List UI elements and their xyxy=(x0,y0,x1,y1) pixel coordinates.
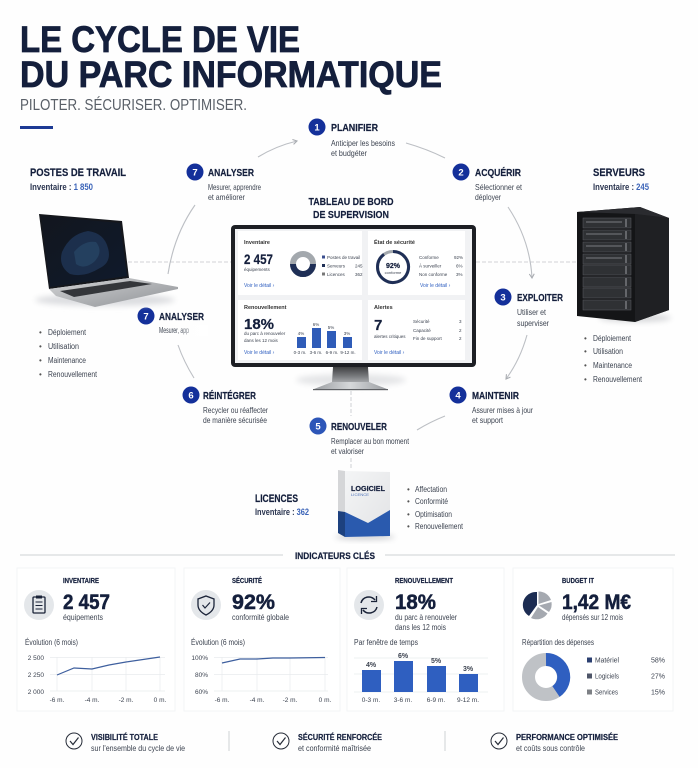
title xyxy=(20,18,442,95)
list: postes de travail: Renouvellement xyxy=(48,370,98,379)
step 2: acquerir xyxy=(452,164,523,202)
panel: inventaire: INVENTAIRE xyxy=(63,578,99,585)
subtitle: PILOTER. SÉCURISER. OPTIMISER. xyxy=(20,97,247,114)
list: serveurs: • xyxy=(584,375,587,384)
list: serveurs: Renouvellement xyxy=(593,375,643,384)
card: alertes: Sécurité xyxy=(413,319,430,324)
list: postes de travail: • xyxy=(39,342,42,351)
card: alertes: 7 xyxy=(374,317,382,334)
step 1: planifier: Anticiper les besoins xyxy=(331,138,395,148)
list: postes de travail: Utilisation xyxy=(48,342,79,351)
step 3: exploiter: Utiliser et xyxy=(517,307,547,317)
card: etat de securite: 92% xyxy=(454,255,463,260)
line chart: securite: -2 m. xyxy=(283,697,298,704)
line chart: inventaire: 2 000 xyxy=(28,689,44,696)
legend: budget xyxy=(587,658,665,696)
icon: refresh xyxy=(354,590,384,620)
panel: securite xyxy=(184,568,340,711)
line chart: securite: -4 m. xyxy=(250,697,265,704)
card: etat de securite xyxy=(368,231,465,295)
list: postes de travail: • xyxy=(39,356,42,365)
step 1: planifier xyxy=(308,118,395,158)
list: licences: • xyxy=(407,510,410,519)
step 4: maintenir: et support xyxy=(472,415,504,425)
panel: licences heading: LICENCES xyxy=(255,493,298,505)
card: alertes: Fin de support xyxy=(413,336,443,341)
step 2: acquerir: ACQUÉRIR xyxy=(475,166,522,179)
panel: licences heading xyxy=(255,493,309,517)
benefit: performance optimisee: et coûts sous contrôle xyxy=(516,744,585,753)
dashed connectors xyxy=(128,262,578,470)
list: serveurs: • xyxy=(584,347,587,356)
panel: inventaire xyxy=(17,568,175,711)
card: renouvellement: 3% xyxy=(344,331,350,336)
card: etat de securite: Conforme xyxy=(419,255,439,260)
list: licences xyxy=(407,485,464,531)
icon: laptop xyxy=(35,214,178,307)
legend: budget: Matériel xyxy=(595,658,619,664)
list: postes de travail: Déploiement xyxy=(48,328,87,337)
list: licences: • xyxy=(407,522,410,531)
card: etat de securite: État de sécurité xyxy=(374,238,415,246)
section heading: indicateurs cles: INDICATEURS CLÉS xyxy=(295,551,375,562)
panel: licences heading: Inventaire : 362 xyxy=(255,507,309,517)
line chart: inventaire: 2 250 xyxy=(28,672,44,679)
list: serveurs: • xyxy=(584,361,587,370)
line chart: securite: -6 m. xyxy=(215,697,230,704)
line chart: inventaire: 0 m. xyxy=(154,697,167,704)
list: licences: Optimisation xyxy=(415,510,452,519)
step 5: renouveler: et valoriser xyxy=(331,446,364,456)
bar chart: renouvellement: 0-3 m. xyxy=(362,697,380,704)
card: inventaire: équipements xyxy=(244,267,271,272)
step 6: reintegrer: Recycler ou réaffecter xyxy=(203,405,268,415)
panel: budget it: 1,42 M€ xyxy=(562,591,631,614)
cycle arrows xyxy=(168,141,532,430)
step 5: renouveler: Remplacer au bon moment xyxy=(331,436,409,446)
benefit: visibilite totale xyxy=(66,733,185,753)
panel: securite: conformité globale xyxy=(232,613,289,622)
panel: inventaire: Évolution (6 mois) xyxy=(25,638,78,647)
card: renouvellement: 6% xyxy=(313,322,319,327)
bar chart: renouvellement: 3-6 m. xyxy=(394,697,412,704)
step 3: exploiter: EXPLOITER xyxy=(517,293,564,304)
card: inventaire: Postes de travail xyxy=(327,255,360,260)
step 7: analyser (lower) xyxy=(138,308,208,336)
benefit: securite renforcee xyxy=(273,733,383,753)
panel: serveurs heading: SERVEURS xyxy=(593,167,645,179)
card: alertes xyxy=(368,300,465,360)
icon: clipboard xyxy=(24,590,54,620)
card: etat de securite: conforme xyxy=(385,270,402,275)
card: inventaire: Serveurs xyxy=(327,264,346,268)
card: renouvellement: 3-6 m. xyxy=(310,350,322,355)
step 4: maintenir: Assurer mises à jour xyxy=(472,405,533,415)
list: postes de travail xyxy=(39,328,98,379)
panel: inventaire: équipements xyxy=(63,613,103,622)
step 3: exploiter: superviser xyxy=(517,318,549,328)
card: renouvellement: 0-3 m. xyxy=(294,350,306,355)
panel: renouvellement: dans les 12 mois xyxy=(395,623,446,632)
step 7: analyser (top): et améliorer xyxy=(208,192,245,202)
icon: software licence box: LICENCE xyxy=(351,493,369,497)
card: etat de securite: 3% xyxy=(456,272,463,277)
panel: renouvellement xyxy=(347,568,504,711)
card: etat de securite: Non conforme xyxy=(419,272,448,277)
card: renouvellement: dans les 12 mois xyxy=(244,338,279,343)
step 4: maintenir xyxy=(450,386,533,425)
step 5: renouveler xyxy=(310,418,409,456)
title: DU PARC INFORMATIQUE xyxy=(20,53,442,95)
step 6: reintegrer: 6 xyxy=(188,390,194,402)
line chart: securite: 0 m. xyxy=(319,697,332,704)
benefit: securite renforcee: et conformité maîtrisée xyxy=(298,744,371,753)
step 7: analyser (lower): Mesurer, app xyxy=(159,325,189,335)
panel: inventaire: 2 457 xyxy=(63,591,110,614)
line chart: inventaire xyxy=(28,655,167,704)
panel: securite: 92% xyxy=(232,591,275,614)
benefit: securite renforcee: SÉCURITÉ RENFORCÉE xyxy=(298,733,383,742)
bar chart: renouvellement: 9-12 m. xyxy=(457,697,479,704)
card: renouvellement: 18% xyxy=(244,316,274,333)
list: serveurs: Utilisation xyxy=(593,347,623,356)
legend: budget: 27% xyxy=(651,674,665,680)
card: alertes: 2 xyxy=(459,328,462,333)
benefit: visibilite totale: VISIBILITÉ TOTALE xyxy=(91,733,159,742)
icon: software licence box: LOGICIEL xyxy=(351,484,385,493)
monitor dashboard xyxy=(231,225,476,390)
card: inventaire xyxy=(238,231,363,295)
step 6: reintegrer xyxy=(182,386,268,425)
card: inventaire: Inventaire xyxy=(244,240,270,246)
list: serveurs xyxy=(584,334,643,384)
step 7: analyser (top): Mesurer, apprendre xyxy=(208,182,261,192)
panel: renouvellement: RENOUVELLEMENT xyxy=(395,578,454,585)
card: inventaire: 245 xyxy=(355,264,363,268)
step 7: analyser (top): ANALYSER xyxy=(208,168,255,179)
list: postes de travail: • xyxy=(39,328,42,337)
icon: server rack xyxy=(577,207,671,322)
card: alertes: Alertes xyxy=(374,305,393,311)
list: licences: Affectation xyxy=(415,485,447,494)
list: serveurs: • xyxy=(584,334,587,343)
benefit: visibilite totale: sur l'ensemble du cycle de vie xyxy=(91,744,185,753)
step 2: acquerir: déployer xyxy=(475,192,501,202)
list: serveurs: Déploiement xyxy=(593,334,632,343)
list: postes de travail: Maintenance xyxy=(48,356,86,365)
card: renouvellement: 9-12 m. xyxy=(340,350,356,355)
donut chart: budget xyxy=(528,659,564,694)
bar chart: renouvellement: 6-9 m. xyxy=(427,697,445,704)
panel: budget it: BUDGET IT xyxy=(562,578,595,585)
card: inventaire: 2 457 xyxy=(244,251,273,267)
step 2: acquerir: 2 xyxy=(458,168,464,178)
card: renouvellement: Voir le détail › xyxy=(244,350,275,356)
step 4: maintenir: MAINTENIR xyxy=(472,391,520,402)
panel: renouvellement: 18% xyxy=(395,591,436,614)
card: renouvellement: 4% xyxy=(298,331,304,336)
bar chart: renouvellement xyxy=(354,653,488,704)
panel: postes de travail heading: Inventaire : 1 850 xyxy=(30,182,93,192)
card: inventaire: Voir le détail › xyxy=(244,283,275,289)
step 6: reintegrer: de manière sécurisée xyxy=(203,415,267,425)
step 7: analyser (lower): ANALYSER xyxy=(159,312,205,323)
bar chart: renouvellement: 4% xyxy=(366,662,377,669)
card: etat de securite: Voir le détail › xyxy=(420,283,451,289)
title: LE CYCLE DE VIE xyxy=(20,18,300,60)
list: licences: • xyxy=(407,485,410,494)
bar chart: renouvellement: 3% xyxy=(463,666,474,673)
step 6: reintegrer: RÉINTÉGRER xyxy=(203,389,257,402)
line chart: securite: 60% xyxy=(195,689,208,696)
line chart: inventaire: -6 m. xyxy=(50,697,65,704)
step 7: analyser (top): 7 xyxy=(192,168,198,178)
card: inventaire: Licences xyxy=(327,272,346,277)
line chart: inventaire: 2 500 xyxy=(28,655,44,662)
panel: postes de travail heading: POSTES DE TRAVAIL xyxy=(30,167,126,179)
legend: budget: Services xyxy=(595,690,618,696)
step 2: acquerir: Sélectionner et xyxy=(475,182,523,192)
line chart: securite xyxy=(191,655,332,704)
card: etat de securite: 6% xyxy=(456,264,463,268)
legend: budget: 15% xyxy=(651,690,665,696)
card: etat de securite: À surveiller xyxy=(419,262,442,268)
monitor heading: TABLEAU DE BORD xyxy=(308,196,394,208)
list: serveurs: Maintenance xyxy=(593,361,632,370)
monitor frame xyxy=(231,225,476,367)
step 3: exploiter xyxy=(494,288,564,328)
legend: budget: Logiciels xyxy=(595,674,619,680)
panel: budget it: Répartition des dépenses xyxy=(522,638,594,647)
card: alertes: Capacité xyxy=(413,328,431,333)
step 7: analyser (lower): 7 xyxy=(143,312,149,322)
panel: securite: SÉCURITÉ xyxy=(232,576,262,585)
step 5: renouveler: 5 xyxy=(315,422,321,432)
card: renouvellement: 5% xyxy=(328,325,334,330)
line chart: inventaire: -2 m. xyxy=(119,697,134,704)
benefit: performance optimisee: PERFORMANCE OPTIMISÉE xyxy=(516,733,619,742)
step 5: renouveler: RENOUVELER xyxy=(331,422,388,433)
panel: serveurs heading xyxy=(593,167,649,192)
panel: renouvellement: Par fenêtre de temps xyxy=(354,638,418,647)
icon: shield xyxy=(191,590,221,620)
card: inventaire: 362 xyxy=(355,272,363,277)
card: renouvellement: Renouvellement xyxy=(244,305,287,311)
step 1: planifier: 1 xyxy=(314,122,320,134)
panel: securite: Évolution (6 mois) xyxy=(191,638,245,647)
card: etat de securite: 92% xyxy=(386,263,401,270)
panel: renouvellement: du parc à renouveler xyxy=(395,613,457,622)
step 3: exploiter: 3 xyxy=(500,292,506,304)
step 7: analyser (top) xyxy=(186,164,261,202)
line chart: inventaire: -4 m. xyxy=(85,697,100,704)
benefit: performance optimisee xyxy=(491,733,619,753)
card: alertes: 2 xyxy=(459,336,462,341)
card: alertes: alertes critiques xyxy=(374,334,406,339)
card: alertes: Voir le détail › xyxy=(374,350,405,356)
list: licences: Conformité xyxy=(415,497,448,506)
accent rule xyxy=(20,126,53,129)
card: renouvellement: du parc à renouveler xyxy=(244,331,286,336)
panel: serveurs heading: Inventaire : 245 xyxy=(593,182,649,192)
bar chart: renouvellement: 6% xyxy=(398,653,409,660)
card: renouvellement: 6-9 m. xyxy=(326,350,338,355)
line chart: securite: 80% xyxy=(195,672,208,679)
list: licences: Renouvellement xyxy=(415,522,464,531)
card: renouvellement xyxy=(238,300,362,360)
card: alertes: 3 xyxy=(459,319,462,324)
step 1: planifier: PLANIFIER xyxy=(331,123,379,134)
list: postes de travail: • xyxy=(39,370,42,379)
line chart: securite: 100% xyxy=(191,655,208,662)
step 4: maintenir: 4 xyxy=(455,390,461,402)
icon: pie xyxy=(523,591,552,619)
monitor stand xyxy=(296,367,406,390)
panel: postes de travail heading xyxy=(30,167,126,192)
bar chart: renouvellement: 5% xyxy=(431,658,442,665)
list: licences: • xyxy=(407,497,410,506)
panel: budget it xyxy=(513,568,673,711)
monitor heading xyxy=(308,196,394,221)
monitor heading: DE SUPERVISION xyxy=(313,209,389,221)
legend: budget: 58% xyxy=(651,658,665,664)
step 1: planifier: et budgéter xyxy=(331,148,367,158)
panel: budget it: dépensés sur 12 mois xyxy=(562,613,623,622)
icon: software licence box xyxy=(335,470,395,540)
